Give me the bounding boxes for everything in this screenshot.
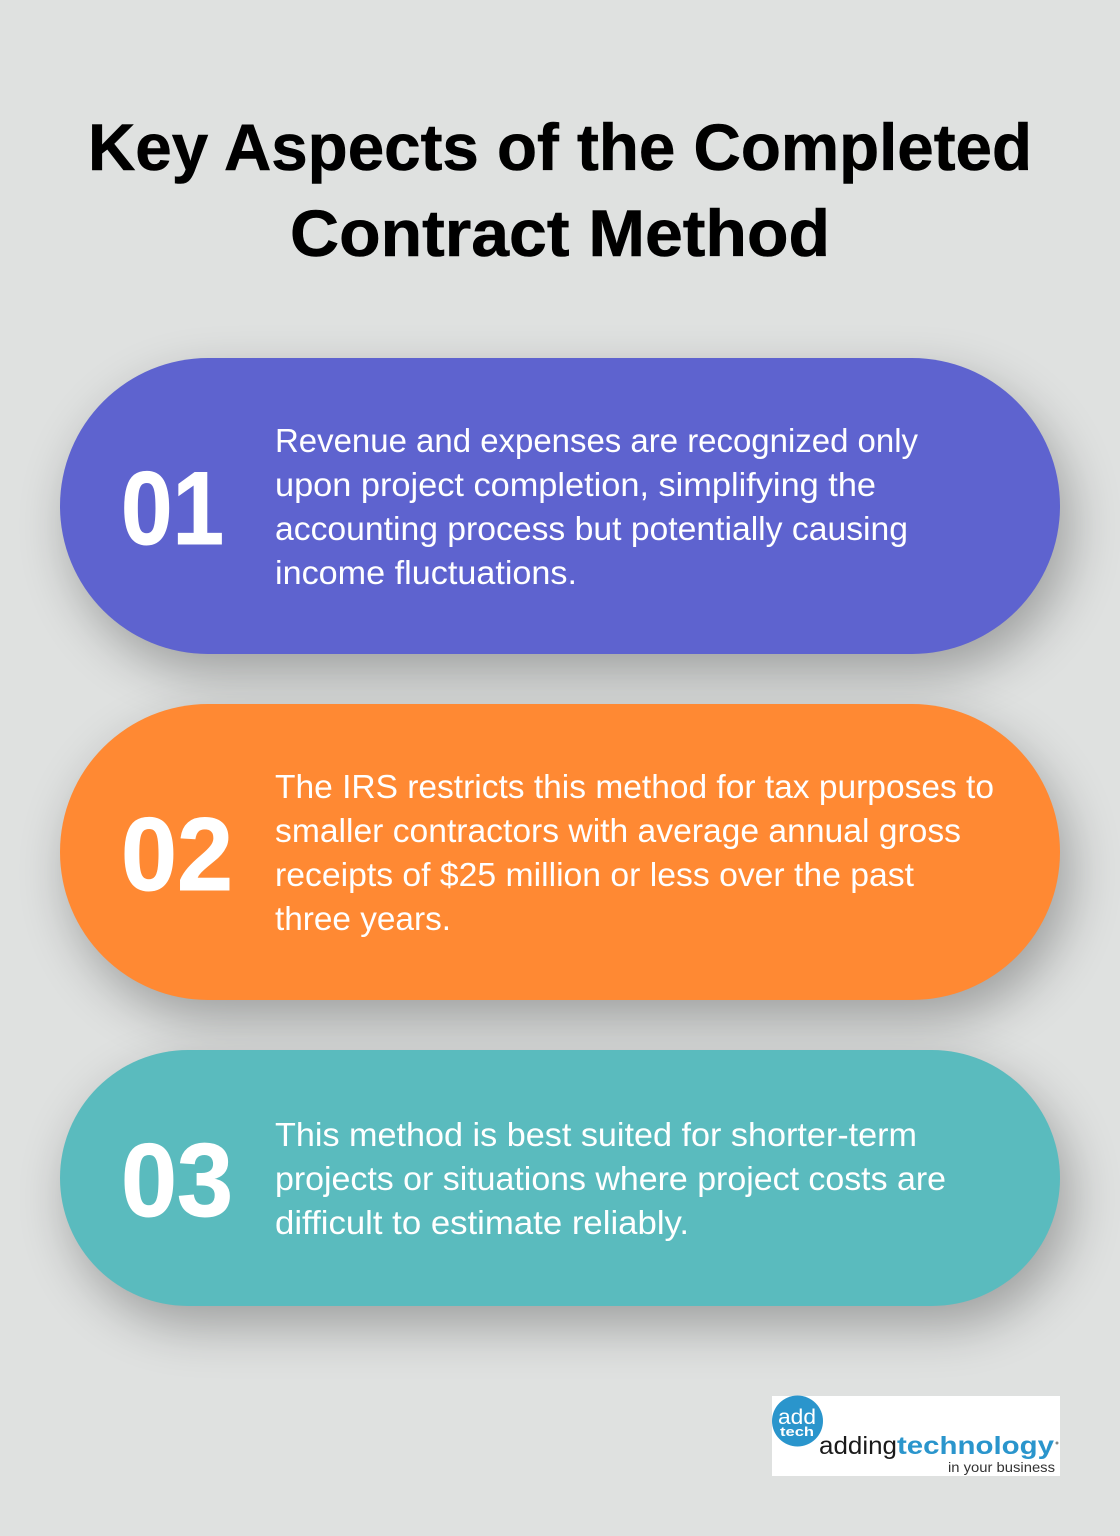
logo: adding technology: technology <box>897 1432 1054 1460</box>
card 01 text: income fluctuations. <box>275 554 577 591</box>
card 02 text: smaller contractors with average annual gross <box>275 812 961 849</box>
title: Contract Method <box>290 196 830 270</box>
card 03 text: projects or situations where project costs are <box>275 1160 946 1197</box>
card 03 text <box>275 1116 946 1241</box>
card 01 text: Revenue and expenses are recognized only <box>275 422 918 459</box>
card 02 text: receipts of $25 million or less over the past <box>275 856 914 893</box>
logo: adding technology: in your business <box>948 1459 1055 1475</box>
card 01 text <box>275 422 918 591</box>
card 02 text: The IRS restricts this method for tax purposes to <box>275 768 994 805</box>
card 01 text: upon project completion, simplifying the <box>275 466 876 503</box>
logo: adding technology <box>772 1396 1060 1476</box>
card 02 text <box>275 768 994 937</box>
title <box>88 110 1032 270</box>
card 02 number: 02 <box>121 797 233 913</box>
logo: adding technology: tech <box>780 1424 814 1439</box>
title: Key Aspects of the Completed <box>88 110 1032 184</box>
logo: adding technology: adding <box>819 1432 897 1460</box>
pill background: card 01 <box>60 358 1060 654</box>
card 03 number: 03 <box>121 1123 233 1239</box>
logo: adding technology: add <box>778 1406 816 1429</box>
card 03 text: This method is best suited for shorter-term <box>275 1116 917 1153</box>
card 03 text: difficult to estimate reliably. <box>275 1204 689 1241</box>
card 01 text: accounting process but potentially causing <box>275 510 908 547</box>
pill background: card 03 <box>60 1050 1060 1306</box>
card 01 number: 01 <box>121 451 224 567</box>
card 02 text: three years. <box>275 900 451 937</box>
pill background: card 02 <box>60 704 1060 1000</box>
